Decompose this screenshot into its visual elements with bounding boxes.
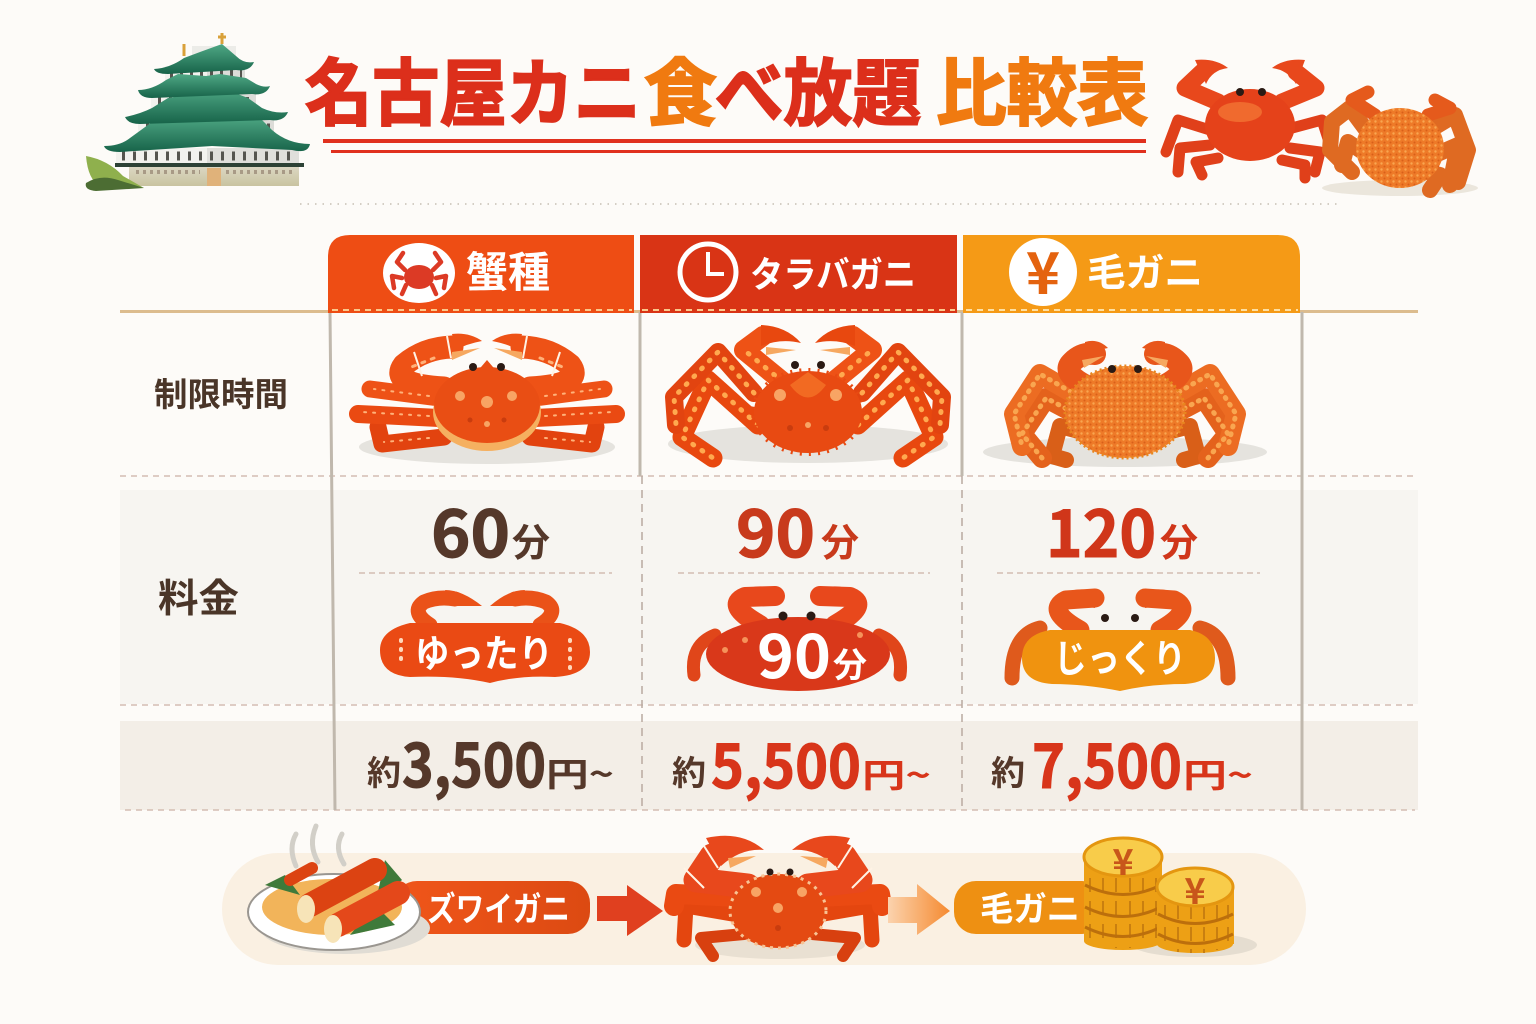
icon: crab — [392, 253, 446, 294]
price: 3,500 yen: 3,500 — [402, 718, 546, 805]
arrow: orange — [888, 884, 950, 935]
table grid lines — [120, 310, 1418, 810]
price: 7,500 yen — [991, 719, 1253, 806]
title: 名古屋カニ — [305, 35, 641, 141]
badge: relaxed — [380, 590, 590, 683]
top-right crabs — [1166, 60, 1478, 196]
header: crab type — [328, 235, 634, 313]
price: 5,500 yen: 円~ — [862, 749, 931, 797]
badge: 90 minutes crab — [693, 586, 901, 696]
badge: 90 minutes crab: 90 — [757, 609, 831, 696]
header: crab type: 蟹種 — [466, 239, 550, 300]
title: 食 — [644, 35, 717, 141]
price: 5,500 yen: 5,500 — [711, 719, 861, 806]
badge: relaxed: ゆったり — [415, 623, 553, 678]
header: king crab: タラバガニ — [750, 246, 916, 298]
price: 5,500 yen — [672, 719, 931, 806]
footer crab — [674, 836, 882, 959]
arrow: red — [597, 885, 663, 936]
footer pill: snow crab: ズワイガニ — [427, 882, 570, 931]
plate of crab legs — [248, 826, 430, 954]
price: 7,500 yen: 円~ — [1183, 749, 1253, 797]
price: 3,500 yen — [367, 718, 614, 805]
table bands — [120, 490, 1418, 810]
header: hairy crab: 毛ガニ — [1087, 242, 1203, 297]
coin stacks: ¥ — [1112, 834, 1134, 886]
crab: king crab — [668, 325, 948, 463]
castle roofs — [104, 44, 310, 152]
header: king crab — [640, 235, 957, 313]
price: 5,500 yen: 約 — [672, 746, 706, 795]
value: 60 minutes: 分 — [512, 512, 550, 567]
row label: price: 料金 — [158, 568, 239, 624]
value: 90 minutes — [736, 484, 859, 576]
price: 7,500 yen: 約 — [991, 746, 1025, 795]
value: 90 minutes: 分 — [821, 512, 859, 567]
title — [305, 35, 1148, 141]
coin stacks: ¥ — [1184, 863, 1206, 915]
badge: thorough crab — [1012, 589, 1228, 691]
dotted divider — [300, 203, 1340, 205]
footer pill: hairy crab: 毛ガニ — [980, 882, 1080, 931]
header: hairy crab — [963, 227, 1300, 313]
price: 3,500 yen: 約 — [367, 746, 401, 795]
header: hairy crab: ¥ — [1026, 227, 1060, 311]
value: 60 minutes: 60 — [431, 484, 510, 576]
row label: time limit: 制限時間 — [154, 368, 288, 416]
value: 60 minutes — [431, 484, 550, 576]
title: べ放題 — [715, 35, 921, 141]
badge: 90 minutes crab: 分 — [833, 638, 867, 687]
castle walls — [115, 46, 304, 186]
value: 120 minutes: 120 — [1046, 484, 1156, 576]
title: 比較表 — [936, 35, 1148, 141]
footer band — [222, 853, 1306, 965]
castle illustration — [86, 33, 310, 191]
icon: clock — [680, 244, 736, 300]
value: 90 minutes: 90 — [736, 484, 815, 576]
crab: hairy crab — [983, 341, 1267, 467]
badge: thorough crab: じっくり — [1054, 628, 1186, 683]
title underline — [323, 139, 1146, 153]
price: 7,500 yen: 7,500 — [1032, 719, 1182, 806]
value: 120 minutes: 分 — [1160, 512, 1198, 567]
footer pill: hairy crab — [954, 881, 1104, 934]
crab: snow crab — [358, 334, 616, 464]
coin stacks — [1084, 834, 1257, 957]
price: 3,500 yen: 円~ — [546, 748, 614, 796]
